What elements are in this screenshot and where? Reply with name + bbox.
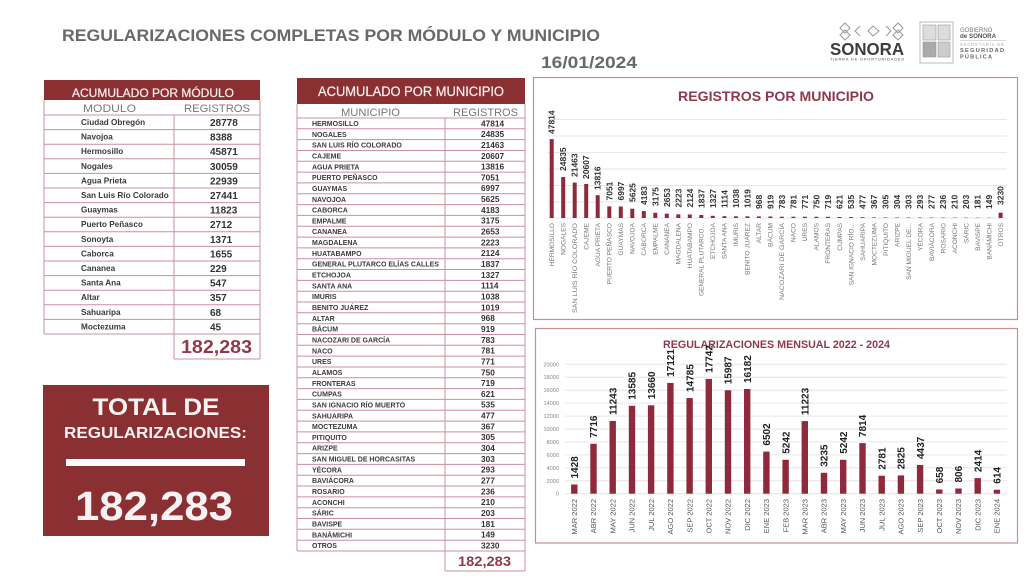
value labels: 367 — [869, 195, 879, 209]
value labels: 149 — [984, 195, 994, 209]
category labels: HERMOSILLO — [549, 223, 556, 266]
month labels: FEB 2023 — [781, 499, 790, 532]
value labels: 21463 — [570, 153, 580, 177]
category labels: IMURIS — [733, 222, 740, 246]
category labels: ARIZPE — [894, 222, 901, 247]
category labels: CUMPAS — [837, 222, 844, 251]
municipality values: 293 — [481, 465, 495, 475]
value labels: 2825 — [897, 447, 908, 469]
category labels: URES — [802, 222, 809, 241]
value labels: 1428 — [570, 456, 581, 478]
value labels: 1327 — [708, 189, 718, 208]
category labels: SÁRIC — [961, 223, 970, 243]
module values: 229 — [210, 264, 227, 275]
value labels: 1837 — [696, 189, 706, 208]
municipality values: 1038 — [481, 292, 500, 302]
municipality names: PUERTO PEÑASCO — [312, 173, 378, 182]
panel: total de regularizaciones: 182,283 — [75, 483, 233, 529]
category labels: SANTA ANA — [722, 222, 729, 259]
month labels: ABR 2022 — [589, 499, 598, 533]
module values: 28778 — [210, 118, 238, 129]
module values: 547 — [210, 279, 227, 290]
module names: Caborca — [81, 249, 114, 258]
municipality values: 3175 — [481, 216, 500, 226]
category labels: ALTAR — [756, 223, 763, 243]
column headers — [341, 107, 518, 119]
logo: Secretaría de Seguridad Pública: SECRETARÍA DE — [960, 42, 1004, 47]
month labels: MAY 2023 — [839, 499, 848, 533]
logo: Sonora: SONORA — [830, 39, 904, 59]
logo: Secretaría de Seguridad Pública — [920, 22, 1006, 63]
month labels: NOV 2022 — [724, 499, 733, 534]
value labels: 15987 — [724, 356, 735, 384]
municipality names: MAGDALENA — [312, 240, 358, 247]
module values — [210, 118, 238, 333]
municipality names: IMURIS — [312, 294, 337, 301]
value labels: 17742 — [704, 345, 716, 373]
value labels: 7814 — [858, 414, 869, 437]
category labels: ACONCHI — [952, 223, 959, 253]
category labels: FRONTERAS — [825, 222, 832, 264]
municipality names: BÁCUM — [312, 325, 338, 334]
category labels: BANÁMICHI — [984, 223, 993, 260]
category labels: CANANEA — [664, 222, 671, 255]
value labels — [570, 345, 1004, 484]
value labels: 13816 — [593, 166, 603, 190]
category labels: BÁCUM — [766, 223, 775, 247]
month labels: AGO 2023 — [897, 499, 906, 534]
panel: total de regularizaciones: TOTAL DE — [92, 394, 220, 421]
municipality values: 20607 — [481, 151, 504, 161]
value labels: 11223 — [800, 387, 812, 415]
municipality values: 3230 — [481, 540, 500, 550]
module values: 45 — [210, 322, 222, 333]
bars — [550, 139, 1003, 218]
category labels: SAHUARIPA — [860, 222, 867, 261]
y axis labels: 18000 — [543, 375, 559, 381]
category labels: ETCHOJOA — [710, 222, 717, 259]
value labels: 6502 — [762, 423, 773, 446]
month labels: MAR 2023 — [800, 499, 810, 534]
value labels: 5242 — [839, 431, 850, 454]
value labels: 5625 — [627, 183, 637, 202]
module values: 22939 — [210, 176, 238, 187]
category labels: ALAMOS — [814, 222, 821, 250]
value labels: 303 — [904, 195, 914, 209]
value labels: 806 — [954, 465, 965, 482]
category labels: SAN IGNACIO RÍO... — [846, 223, 855, 285]
municipality values: 149 — [481, 530, 495, 540]
municipality values: 277 — [481, 476, 495, 486]
municipality values: 24835 — [481, 129, 504, 139]
municipality names: ROSARIO — [312, 489, 345, 496]
municipality names: BANÁMICHI — [312, 530, 352, 539]
municipality values: 203 — [481, 508, 495, 518]
y axis labels: 0 — [556, 492, 559, 498]
municipality names: ARIZPE — [312, 446, 338, 453]
value labels: 658 — [935, 466, 946, 483]
municipality values: 47814 — [481, 118, 504, 128]
category labels: SAN MIGUEL DE... — [906, 223, 913, 280]
y axis labels: 6000 — [547, 453, 559, 459]
module values: 27441 — [210, 191, 238, 202]
municipality names: CANANEA — [312, 229, 347, 236]
category labels: BAVIÁCORA — [927, 222, 936, 261]
module values: 68 — [210, 308, 222, 319]
panel: acumulado por módulo — [44, 80, 260, 359]
month labels: OCT 2023 — [935, 499, 944, 533]
municipality values: 1019 — [481, 302, 500, 312]
municipality names: URES — [312, 359, 332, 366]
module total: 182,283 — [181, 336, 252, 357]
municipality values: 919 — [481, 324, 495, 334]
category labels: NOGALES — [560, 222, 568, 255]
municipality values: 2124 — [481, 248, 500, 258]
module values: 30059 — [210, 162, 238, 173]
month labels: ABR 2023 — [820, 499, 829, 533]
municipality names: GENERAL PLUTARCO ELÍAS CALLES — [312, 260, 439, 269]
municipality names: NACOZARI DE GARCÍA — [312, 336, 390, 344]
category labels: MOCTEZUMA — [871, 222, 878, 266]
logo: Secretaría de Seguridad Pública: SEGURIDAD — [960, 48, 1004, 54]
y axis labels: 16000 — [543, 388, 559, 394]
module names: Ciudad Obregón — [81, 118, 145, 127]
category labels: AGUA PRIETA — [595, 222, 602, 266]
municipality names: ETCHOJOA — [312, 272, 351, 280]
y axis labels: 2000 — [547, 479, 559, 485]
month labels: OCT 2022 — [704, 499, 714, 533]
value labels: 5242 — [781, 431, 792, 454]
value labels: 1019 — [742, 189, 752, 208]
module names: Puerto Peñasco — [81, 220, 143, 229]
municipality values: 783 — [481, 335, 495, 345]
category labels: HUATABAMPO — [687, 223, 694, 268]
municipality names: SANTA ANA — [312, 283, 352, 290]
municipality names: CABORCA — [312, 208, 348, 215]
logo: Secretaría de Seguridad Pública: PÚBLICA — [960, 54, 992, 60]
category labels: PITIQUITO — [883, 223, 890, 256]
municipality names: CUMPAS — [312, 392, 342, 399]
municipality names: OTROS — [312, 543, 337, 550]
value labels: 277 — [926, 195, 936, 209]
module names: Agua Prieta — [81, 176, 127, 185]
logo: Sonora: TIERRA DE OPORTUNIDADES — [830, 56, 904, 62]
column headers: REGISTROS — [184, 103, 250, 115]
value labels: 203 — [961, 195, 971, 209]
month labels: ENE 2023 — [762, 499, 771, 533]
municipality names: YÉCORA — [312, 465, 342, 474]
category labels: BENITO JUÁREZ — [743, 223, 752, 275]
category labels: YÉCORA — [915, 222, 924, 251]
municipality names: FRONTERAS — [312, 381, 356, 388]
panel: total de regularizaciones: REGULARIZACIONES: — [64, 425, 247, 442]
value labels: 6997 — [616, 181, 626, 200]
month labels: JUN 2023 — [858, 499, 867, 532]
month labels — [570, 499, 1002, 534]
category labels: BAVISPE — [975, 222, 982, 251]
month labels: JUL 2022 — [647, 499, 656, 531]
date: 16/01/2024 — [541, 54, 638, 72]
value labels: 2653 — [662, 188, 672, 207]
value labels: 305 — [880, 195, 890, 209]
panel: regularizaciones mensual chart — [536, 328, 1018, 543]
month labels: JUL 2023 — [877, 499, 886, 531]
category labels: NAVOJOA — [630, 222, 637, 254]
module names: San Luis Río Colorado — [81, 191, 169, 200]
municipality values: 968 — [481, 313, 495, 323]
panel: total de regularizaciones — [43, 385, 269, 536]
module names: Nogales — [81, 162, 113, 171]
category labels: NACOZARI DE GARCÍA — [777, 222, 786, 300]
module names: Altar — [81, 293, 100, 302]
municipality values: 1327 — [481, 270, 500, 280]
value labels: 17121 — [666, 349, 677, 377]
value labels: 20607 — [581, 155, 591, 179]
municipality names — [312, 121, 439, 550]
municipality values: 21463 — [481, 140, 504, 150]
value labels: 4437 — [916, 436, 927, 459]
category labels: OTROS — [998, 222, 1005, 246]
municipality names: SAN LUIS RÍO COLORADO — [312, 141, 402, 150]
module names: Guaymas — [81, 206, 118, 215]
module names — [81, 118, 169, 331]
title: REGULARIZACIONES COMPLETAS POR MÓDULO Y MUNICIPIO — [62, 26, 600, 45]
category labels: GUAYMAS — [618, 222, 625, 256]
category labels: GENERAL PLUTARCO... — [699, 223, 706, 296]
municipality values: 781 — [481, 346, 495, 356]
y axis labels: 10000 — [543, 427, 559, 433]
module values: 11823 — [210, 206, 238, 217]
category labels: PUERTO PEÑASCO — [605, 223, 614, 284]
module names: Navojoa — [81, 133, 113, 142]
month labels: SEP 2022 — [685, 499, 694, 533]
municipality values: 5625 — [481, 194, 500, 204]
column headers: MODULO — [83, 103, 136, 115]
value labels — [547, 110, 1006, 209]
value labels: 4183 — [639, 186, 649, 205]
value labels: 13585 — [628, 372, 639, 400]
municipality values — [481, 118, 504, 551]
module names: Moctezuma — [81, 322, 126, 331]
logo: Secretaría de Seguridad Pública: GOBIERNO — [960, 28, 993, 34]
municipality values: 2653 — [481, 226, 500, 236]
value labels: 535 — [846, 195, 856, 209]
logo: Secretaría de Seguridad Pública: de SONORA — [960, 33, 997, 40]
value labels: 2223 — [673, 188, 683, 208]
value labels: 477 — [858, 195, 868, 209]
category labels: ROSARIO — [940, 223, 947, 253]
municipality names: EMPALME — [312, 218, 347, 225]
municipality values: 621 — [481, 389, 495, 399]
municipality names: SAHUARIPA — [312, 413, 353, 420]
category labels: CAJEME — [584, 222, 590, 250]
value labels: 7716 — [589, 415, 600, 438]
y axis labels — [543, 362, 559, 498]
municipality values: 7051 — [481, 172, 500, 182]
municipality values: 236 — [481, 486, 495, 496]
module names: Sonoyta — [81, 235, 114, 244]
value labels: 293 — [915, 195, 925, 209]
category labels: NACO — [791, 223, 798, 242]
y axis labels: 12000 — [543, 414, 559, 420]
panel: acumulado por municipio — [297, 78, 525, 571]
value labels: 16182 — [743, 355, 754, 383]
value labels: 7051 — [604, 181, 614, 200]
value labels: 236 — [938, 195, 948, 209]
heading: acumulado por municipio — [297, 78, 525, 104]
heading: acumulado por municipio: ACUMULADO POR MUNICIPIO — [318, 84, 504, 99]
value labels: 3230 — [996, 186, 1006, 205]
module names: Cananea — [81, 264, 116, 273]
municipality values: 1837 — [481, 259, 500, 269]
module values: 8388 — [210, 133, 233, 144]
month labels: NOV 2023 — [954, 499, 963, 534]
municipality names: NOGALES — [312, 132, 347, 139]
municipality names: ACONCHI — [312, 500, 345, 507]
value labels: 1038 — [731, 189, 741, 208]
value labels: 14785 — [685, 364, 696, 392]
municipality values: 1114 — [481, 281, 499, 291]
municipality values: 367 — [481, 421, 495, 431]
month labels: DIC 2022 — [743, 499, 752, 531]
value labels: 783 — [777, 195, 787, 209]
municipality names: AGUA PRIETA — [312, 164, 359, 171]
month labels: AGO 2022 — [666, 499, 675, 534]
municipality names: SAN MIGUEL DE HORCASITAS — [312, 457, 416, 464]
municipality names: CAJEME — [312, 154, 342, 160]
value labels: 1114 — [719, 190, 729, 208]
value labels: 2124 — [685, 188, 695, 208]
municipality values: 4183 — [481, 205, 500, 215]
municipality values: 210 — [481, 497, 495, 507]
municipality names: NACO — [312, 348, 333, 355]
heading: acumulado por módulo: ACUMULADO POR MÓDULO — [72, 85, 234, 100]
municipality names: BENITO JUÁREZ — [312, 303, 369, 312]
column headers: REGISTROS — [453, 107, 518, 119]
municipality names: SAN IGNACIO RÍO MUERTO — [312, 400, 406, 409]
value labels: 750 — [811, 195, 821, 209]
month labels: JUN 2022 — [628, 499, 637, 532]
heading: acumulado por módulo — [44, 80, 260, 100]
module values: 45871 — [210, 147, 238, 158]
module names: Sahuaripa — [81, 308, 121, 317]
chart title: REGULARIZACIONES MENSUAL 2022 - 2024 — [663, 339, 891, 351]
value labels: 2781 — [877, 447, 888, 470]
municipality values: 305 — [481, 432, 495, 442]
municipality names: ALTAR — [312, 316, 335, 323]
municipality names: HUATABAMPO — [312, 251, 362, 258]
municipality values: 719 — [481, 378, 495, 388]
month labels: SEP 2023 — [916, 499, 925, 533]
municipality names: PITIQUITO — [312, 435, 347, 442]
municipality values: 750 — [481, 367, 495, 377]
month labels: MAY 2022 — [608, 499, 617, 533]
municipality names: NAVOJOA — [312, 197, 346, 204]
value labels: 11243 — [608, 387, 619, 415]
value labels: 968 — [754, 195, 764, 209]
module names: Santa Ana — [81, 279, 121, 288]
category labels — [549, 222, 1005, 313]
y axis labels: 14000 — [543, 401, 559, 407]
month labels: DIC 2023 — [973, 499, 982, 531]
municipality names: SÁRIC — [312, 509, 334, 518]
municipality names: GUAYMAS — [312, 186, 347, 193]
municipality names: MOCTEZUMA — [312, 424, 358, 431]
y axis labels: 4000 — [547, 466, 559, 472]
value labels: 47814 — [547, 110, 557, 134]
category labels: EMPALME — [653, 222, 660, 255]
value labels: 771 — [800, 195, 810, 209]
module names: Hermosillo — [81, 147, 123, 156]
value labels: 781 — [788, 195, 798, 209]
municipality values: 6997 — [481, 183, 500, 193]
y axis labels: 8000 — [547, 440, 559, 446]
panel: registros por municipio chart — [534, 78, 1018, 320]
value labels: 3175 — [650, 187, 660, 206]
value labels: 919 — [765, 195, 775, 209]
value labels: 13660 — [647, 371, 658, 399]
municipality values: 2223 — [481, 237, 500, 247]
module values: 1371 — [210, 235, 233, 246]
bars — [571, 379, 1000, 494]
value labels: 181 — [973, 195, 983, 209]
y axis labels: 20000 — [543, 362, 559, 368]
municipality names: BAVISPE — [312, 522, 343, 528]
municipality values: 535 — [481, 400, 495, 410]
municipality values: 13816 — [481, 162, 504, 172]
municipality values: 304 — [481, 443, 495, 453]
value labels: 719 — [823, 195, 833, 209]
municipality values: 181 — [481, 519, 495, 529]
logo: Sonora — [830, 23, 904, 62]
value labels: 304 — [892, 195, 902, 209]
municipality values: 477 — [481, 411, 495, 421]
month labels: MAR 2022 — [570, 499, 579, 534]
column headers: MUNICIPIO — [341, 107, 400, 119]
value labels: 621 — [834, 195, 844, 209]
municipality names: ALAMOS — [312, 370, 343, 377]
value labels: 24835 — [558, 147, 568, 171]
value labels: 210 — [950, 195, 960, 209]
module values: 1655 — [210, 249, 233, 260]
municipality values: 771 — [481, 356, 495, 366]
chart title: REGISTROS POR MUNICIPIO — [678, 88, 874, 104]
month labels: ENE 2024 — [993, 499, 1002, 533]
category labels: SAN LUIS RÍO COLORADO — [570, 223, 579, 313]
municipality values: 303 — [481, 454, 495, 464]
municipality names: BAVIÁCORA — [312, 476, 354, 485]
value labels: 614 — [993, 467, 1004, 484]
value labels: 2414 — [973, 449, 984, 472]
category labels: MAGDALENA — [676, 222, 683, 264]
column headers — [83, 103, 250, 115]
module values: 357 — [210, 293, 227, 304]
module values: 2712 — [210, 220, 233, 231]
municipality names: HERMOSILLO — [312, 121, 359, 128]
municipality total: 182,283 — [458, 554, 512, 569]
category labels: CABORCA — [641, 222, 648, 256]
value labels: 3235 — [820, 444, 831, 467]
